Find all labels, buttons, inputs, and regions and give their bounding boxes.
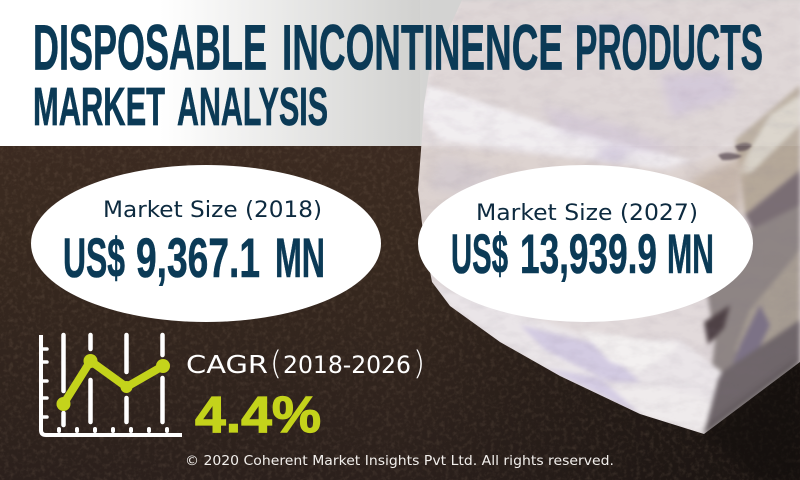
title: INCONTINENCE (282, 12, 563, 84)
callout: market size 2027: US$ (451, 222, 508, 285)
callout: market size 2018: 9,367.1 (136, 226, 260, 289)
CAGR label: ) (413, 344, 425, 382)
callout: market size 2018 (31, 165, 381, 322)
icon: line chart (41, 335, 182, 435)
title: DISPOSABLE (33, 12, 267, 84)
soft white wash over the photo inside the title band (420, 0, 800, 146)
CAGR label: ( (270, 344, 282, 382)
title (33, 12, 763, 137)
CAGR label (186, 344, 425, 382)
CAGR label: 2018-2026 (283, 351, 411, 379)
CAGR label: CAGR (186, 350, 268, 379)
title band (0, 0, 800, 146)
title: MARKET (33, 77, 165, 137)
callout: market size 2018: MN (275, 226, 325, 289)
callout: market size 2027 (418, 165, 753, 322)
callout: market size 2027: MN (667, 222, 714, 285)
shadow right of the stack (704, 362, 800, 480)
copyright: © 2020 Coherent Market Insights Pvt Ltd. All rights reserved. (185, 454, 614, 469)
callout: market size 2018: US$ (63, 226, 125, 289)
CAGR value: 4.4% (195, 386, 321, 443)
callout: market size 2018: Market Size (2018) (103, 198, 322, 223)
callout: market size 2027: 13,939.9 (520, 222, 657, 285)
title: ANALYSIS (177, 77, 328, 137)
callout: market size 2027: Market Size (2027) (476, 201, 698, 226)
photo: stack of diapers (410, 0, 800, 440)
